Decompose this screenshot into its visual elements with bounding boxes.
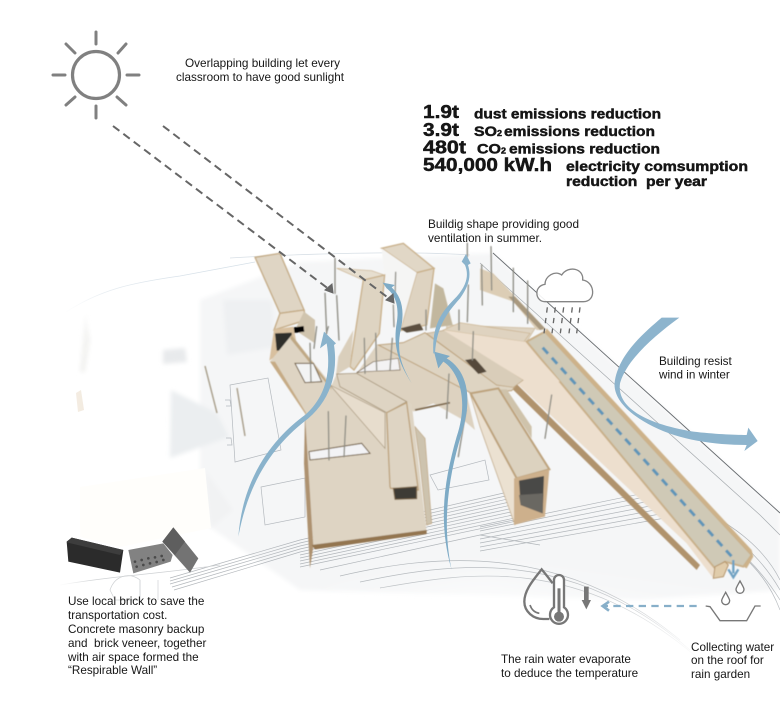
text: winter wind note: Building resist <box>659 355 733 368</box>
summer wind arrow rising through courtyard <box>383 283 412 383</box>
winter wind arrow <box>615 318 758 451</box>
emissions statistics: 1.9t <box>423 102 459 122</box>
text: brick note: with air space formed the <box>67 651 199 664</box>
text: sunlight note <box>176 57 345 84</box>
text: collecting water note <box>691 641 774 681</box>
first wing roof <box>255 253 304 313</box>
nails on foam blocks <box>205 366 245 436</box>
main front roof <box>270 335 427 547</box>
blue roof gutter line <box>543 348 733 558</box>
nails <box>310 243 552 460</box>
emissions statistics: SO <box>474 124 497 139</box>
portal black window <box>294 326 304 333</box>
sun ray dashed arrows <box>113 126 394 303</box>
emissions statistics: 2 <box>501 147 507 156</box>
emissions statistics <box>423 102 748 189</box>
text: ventilation note: ventilation in summer. <box>428 232 542 245</box>
text: ventilation note: Buildig shape providing good <box>428 218 579 231</box>
icon: temperature down arrow <box>582 587 591 609</box>
third wing roof <box>382 243 434 273</box>
dense hatch <box>170 492 508 578</box>
second wing roof <box>337 268 384 280</box>
text: brick note: Use local brick to save the <box>68 595 204 608</box>
icon: rain cloud <box>537 269 593 333</box>
emissions statistics: dust emissions reduction <box>474 106 661 122</box>
summer wind arrow rear <box>433 254 471 353</box>
emissions statistics: 2 <box>497 129 503 138</box>
emissions statistics: emissions reduction <box>504 124 655 139</box>
emissions statistics: emissions reduction <box>509 142 660 157</box>
text: collecting water note: rain garden <box>691 668 750 681</box>
emissions statistics: 480t <box>423 138 466 158</box>
text: collecting water note: Collecting water <box>691 641 774 654</box>
centre roof <box>378 333 515 393</box>
emissions statistics: 3.9t <box>423 120 459 140</box>
back wall <box>430 283 453 328</box>
openings in main roof <box>295 363 322 383</box>
icon: bricks <box>67 527 198 573</box>
text: brick note <box>67 595 206 677</box>
icon: sun <box>53 32 139 118</box>
right wing base edge <box>480 362 700 570</box>
text: collecting water note: on the roof for <box>691 654 764 667</box>
building model <box>205 243 753 578</box>
text: evaporation note: to deduce the temperature <box>501 667 638 680</box>
text: brick note: and brick veneer, together <box>68 637 206 650</box>
right wing top strip <box>447 325 535 342</box>
icon: water drop and thermometer <box>524 569 568 624</box>
icon: rain garden basin with drops <box>706 581 761 621</box>
foam context blocks <box>80 300 275 528</box>
text: winter wind note <box>658 355 733 382</box>
summer wind arrow left <box>238 332 336 537</box>
summer wind arrow centre <box>434 352 467 570</box>
emissions statistics: electricity comsumption <box>566 159 748 174</box>
rear strip <box>480 268 547 330</box>
text: brick note: Concrete masonry backup <box>68 623 205 636</box>
text: evaporation note: The rain water evaporate <box>501 653 631 666</box>
first wing portal <box>269 327 297 361</box>
emissions statistics: 540,000 kW.h <box>423 155 552 175</box>
emissions statistics: CO <box>477 142 501 157</box>
text: sunlight note: classroom to have good sunlight <box>176 71 345 84</box>
text: sunlight note: Overlapping building let every <box>185 57 340 70</box>
text: ventilation note <box>428 218 579 245</box>
emissions statistics: reduction per year <box>566 174 708 189</box>
text: evaporation note <box>501 653 638 680</box>
right wing roof <box>527 332 752 568</box>
right wing wall <box>447 337 720 578</box>
text: winter wind note: wind in winter <box>658 368 730 382</box>
plan drawing lines <box>66 253 489 525</box>
blue dashed water arrow <box>603 602 697 611</box>
floor plate <box>357 343 475 430</box>
short strip <box>500 389 532 438</box>
text: brick note: “Respirable Wall” <box>68 664 157 677</box>
text: brick note: transportation cost. <box>68 609 167 622</box>
